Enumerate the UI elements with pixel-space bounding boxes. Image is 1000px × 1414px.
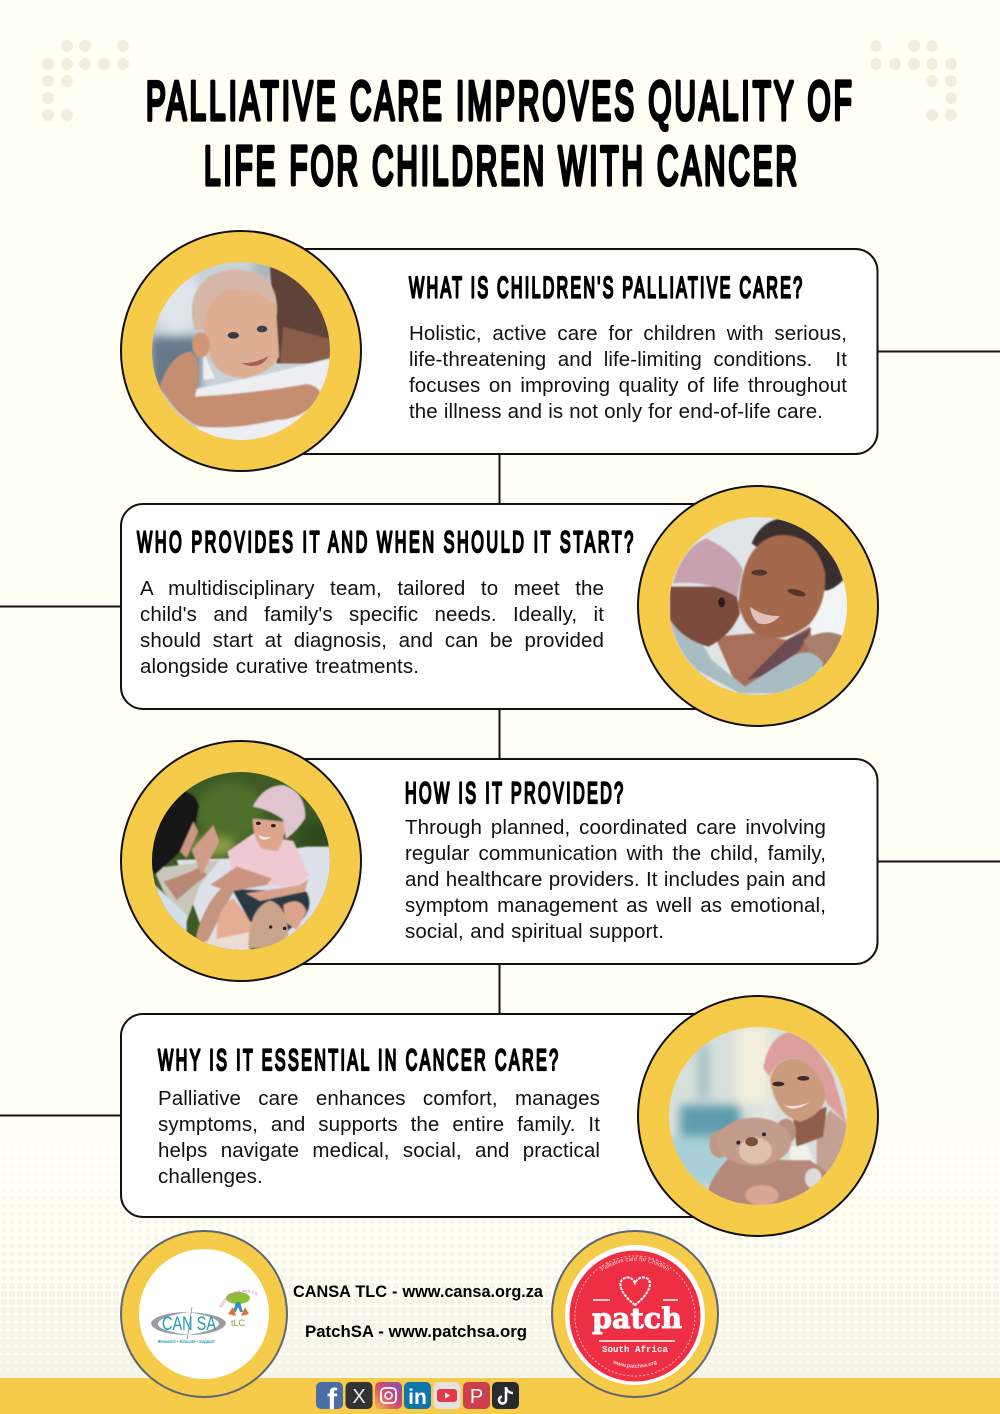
icon: X — [346, 1382, 372, 1409]
panel: what is children's palliative care — [121, 231, 878, 471]
icon: youtube — [434, 1382, 460, 1409]
photo: bald child hugging adult — [150, 260, 333, 443]
icon: instagram — [375, 1382, 402, 1409]
connector lines — [0, 352, 1000, 1116]
text: who provides it: should start at diagnosis, and can be provided — [140, 629, 604, 652]
photo: mother holding child — [667, 515, 850, 698]
photo ring: mother and child — [638, 486, 878, 726]
TLC tree mark — [219, 1289, 258, 1328]
text: what is children's palliative care: Holistic, active care for children with serious, — [409, 322, 847, 345]
logo: PatchSA — [551, 1230, 719, 1398]
heart — [620, 1277, 650, 1305]
text: what is children's palliative care: focuses on improving quality of life throughout — [409, 374, 847, 397]
text: how is it provided — [405, 816, 826, 943]
icon: facebook — [316, 1382, 343, 1414]
CANSA ring and wordmark: CAN SA — [162, 1314, 216, 1335]
patch wordmark: patch — [592, 1302, 682, 1335]
footer link: CANSA: CANSA TLC - www.cansa.org.za — [293, 1283, 543, 1301]
text: why is it essential: Palliative care enhances comfort, manages — [158, 1087, 600, 1110]
icon: X: X — [352, 1386, 366, 1408]
photo ring: girl with teddy — [638, 996, 878, 1236]
TLC tree mark: tLC — [231, 1318, 245, 1328]
logo rules — [593, 1300, 678, 1341]
text: how is it provided: symptom management as well as emotional, — [405, 894, 826, 917]
icon: tiktok — [492, 1382, 519, 1409]
heading: WHO PROVIDES IT AND WHEN SHOULD IT START? — [137, 526, 633, 559]
panel: how is it provided — [121, 741, 878, 981]
www.patchsa.org: www.patchsa.org — [614, 1360, 657, 1368]
panel: who provides it and when should it start — [121, 486, 878, 726]
heading: HOW IS IT PROVIDED? — [405, 777, 623, 810]
text: how is it provided: social, and spiritual support. — [405, 920, 664, 943]
title: LIFE FOR CHILDREN WITH CANCER — [204, 136, 797, 197]
text: who provides it: A multidisciplinary team, tailored to meet the — [140, 577, 604, 600]
photo: girl in pink headscarf with teddy bear — [667, 1025, 850, 1208]
decorative dots: top right — [870, 40, 957, 121]
photo ring: child playing — [121, 741, 361, 981]
icon: linkedin — [404, 1382, 431, 1409]
text: who provides it: alongside curative treatments. — [140, 655, 419, 678]
text: what is children's palliative care: life-threatening and life-limiting conditions. It — [409, 348, 847, 371]
text: how is it provided: and healthcare providers. It includes pain and — [405, 868, 826, 891]
photo ring: bald child — [121, 231, 361, 471]
text: why is it essential: symptoms, and supports the entire family. It — [158, 1113, 600, 1136]
title: PALLIATIVE CARE IMPROVES QUALITY OF — [146, 71, 852, 132]
Palliative care for children: Palliative care for Children — [600, 1256, 669, 1272]
logo: CANSA TLC — [120, 1230, 288, 1398]
TLC tree mark: Better Living with Cancer — [219, 1289, 258, 1308]
text: what is children's palliative care: the illness and is not only for end-of-life care. — [409, 400, 823, 423]
photo: child in pink clapping with adult on grass — [150, 770, 333, 953]
icon: pinterest — [463, 1382, 490, 1409]
South Africa: South Africa — [602, 1344, 668, 1355]
text: how is it provided: Through planned, coordinated care involving — [405, 816, 826, 839]
text: what is children's palliative care — [409, 322, 847, 423]
text: why is it essential: helps navigate medical, social, and practical — [158, 1139, 600, 1162]
heading: WHY IS IT ESSENTIAL IN CANCER CARE? — [158, 1044, 558, 1077]
title — [146, 71, 852, 197]
text: why is it essential — [158, 1087, 600, 1188]
panel: why is it essential in cancer care — [121, 996, 878, 1236]
icon: pinterest: P — [470, 1386, 483, 1408]
text: why is it essential: challenges. — [158, 1165, 263, 1188]
footer link: PatchSA: PatchSA - www.patchsa.org — [305, 1322, 527, 1341]
CANSA ring and wordmark — [151, 1307, 226, 1344]
social icons — [316, 1382, 519, 1414]
heading: WHAT IS CHILDREN'S PALLIATIVE CARE? — [409, 271, 802, 305]
text: who provides it — [140, 577, 604, 678]
footer band — [0, 1378, 1000, 1414]
text: who provides it: child's and family's specific needs. Ideally, it — [140, 603, 604, 626]
decorative dots: top left — [42, 40, 129, 121]
text: how is it provided: regular communication with the child, family, — [405, 842, 826, 865]
icon: linkedin: in — [408, 1386, 427, 1409]
halftone background — [0, 1122, 1000, 1378]
CANSA ring and wordmark: Research • Educate • Support — [158, 1339, 215, 1344]
